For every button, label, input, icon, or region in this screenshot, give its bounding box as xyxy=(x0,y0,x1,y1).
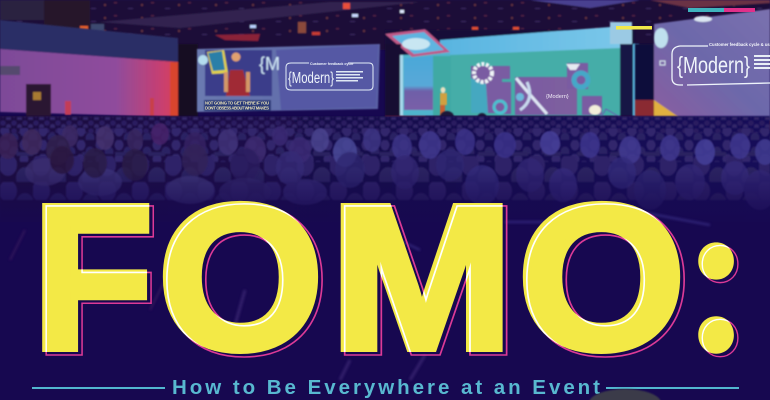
left screen caption: NOT GOING TO GET THERE IF YOU xyxy=(205,100,269,106)
title yellow letters: : xyxy=(684,126,748,400)
stage label Modern: {Modern} xyxy=(546,94,569,100)
decorative colour bars xyxy=(616,8,755,30)
left screen: {M xyxy=(259,54,280,74)
audience xyxy=(0,116,770,232)
right screen Modern diagram xyxy=(672,42,770,85)
title yellow letters: M xyxy=(330,163,513,391)
dark lower seating xyxy=(10,210,710,380)
stage panels with gears and DNA xyxy=(471,63,602,115)
title yellow letters xyxy=(33,126,748,400)
left wall xyxy=(0,20,198,118)
title yellow letters: O xyxy=(158,163,323,392)
left screen Modern diagram: {Modern} xyxy=(288,70,334,87)
title yellow letters: F xyxy=(33,163,153,392)
ceiling with lighting rigs xyxy=(0,0,770,50)
head silhouette at bottom edge xyxy=(589,389,661,400)
stage front xyxy=(385,109,635,125)
left screen Modern diagram: Customer feedback cycle xyxy=(310,62,353,66)
left screen caption: DON'T OBSESS ABOUT WHAT MAKES xyxy=(205,106,269,110)
left screen caption xyxy=(205,100,269,110)
subtitle rule left xyxy=(32,387,165,389)
right screen Modern diagram: {Modern} xyxy=(677,52,750,78)
title yellow letters: O xyxy=(518,163,685,392)
stage backdrop xyxy=(385,22,639,125)
subtitle rule right xyxy=(606,387,739,389)
left screen xyxy=(197,44,380,112)
speaker on stage xyxy=(440,87,447,116)
title: FOMO: xyxy=(42,200,739,358)
right screen xyxy=(635,9,770,130)
subtitle: How to Be Everywhere at an Event xyxy=(172,376,600,399)
left screen Modern diagram xyxy=(286,62,373,90)
